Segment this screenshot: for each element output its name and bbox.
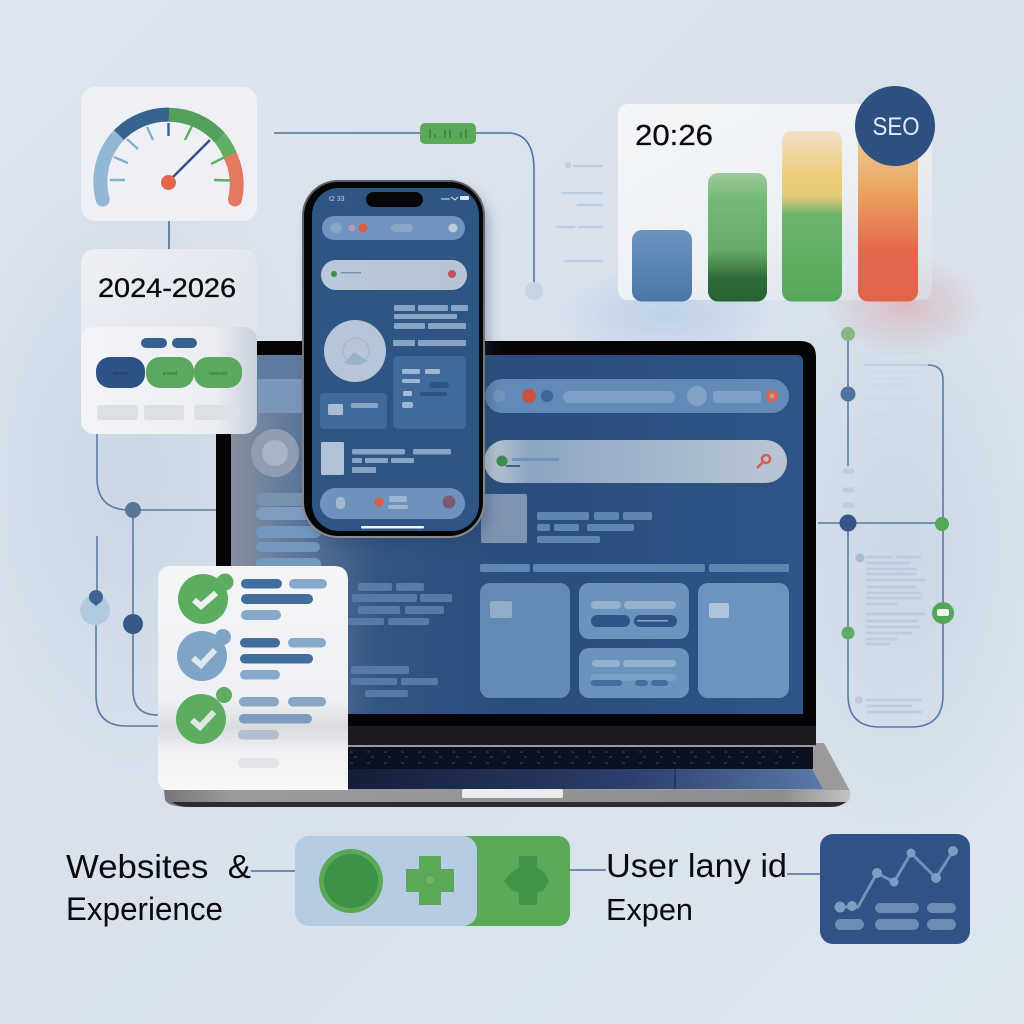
panel: checklist [158,566,348,790]
laptop base [164,789,850,807]
top bar [322,216,465,240]
feature tile [295,836,570,926]
icon: green circle [319,849,383,913]
phone [302,180,488,546]
faint text lines [866,557,925,712]
connector: tile to label [569,869,606,871]
home indicator [361,526,424,528]
thumbnail [481,494,527,543]
label: Websites & Experience: Experience [66,891,223,927]
search bar [484,440,787,483]
label: User lany id Expen: Expen [606,892,693,927]
right panel [393,356,466,429]
green chip [420,123,476,144]
connector: gauge to date card [168,221,170,249]
gauge ticks [110,123,230,180]
segmented sub card [81,327,257,434]
laptop screen [231,355,803,714]
top nav bar [485,379,789,413]
connector lines: top connector with green chip [274,123,543,300]
connector lines: left circuit [80,434,218,726]
node: circuit dark [123,614,143,634]
red key icon [757,455,770,468]
label: Websites & Experience [66,848,251,927]
connector: label to chart tile [787,873,820,875]
SEO badge [855,86,935,166]
status bar: t2 33 [329,196,345,203]
phone body [302,180,485,538]
text pills [393,305,468,346]
bottom bar [320,488,465,519]
SEO badge: SEO [872,113,920,141]
gauge needle [172,140,210,178]
check item 1 [178,574,327,624]
node: light pin [80,590,110,625]
right circuit with faint text [818,327,954,727]
chart time label: 20:26 [635,120,713,152]
label: User lany id Expen: User lany id [606,847,787,884]
green icon node [932,602,954,624]
left panel [320,393,387,429]
segmented sub card: snnvel [163,371,177,377]
laptop deck and keyboard [340,743,850,791]
date range heading: 2024-2026 [98,273,236,303]
node: circuit junction [125,502,141,518]
nodes [841,327,855,341]
label: User lany id Expen [606,847,787,927]
connector: label to feature tile [251,870,295,872]
panel: speedometer gauge [81,87,257,221]
search bar [321,260,467,290]
laptop lid [216,341,816,745]
dynamic island [366,192,423,207]
label: Websites & Experience: Websites & [66,848,251,885]
segmented sub card: soorxs [113,371,128,377]
bars [632,131,918,302]
icon: green plus [406,856,454,905]
mid text pills [348,583,452,697]
phone screen [312,188,479,531]
check item 2 [177,629,326,681]
left sidebar [231,355,321,572]
avatar circle [324,320,386,382]
sparkline [834,846,958,912]
faint endpoint [525,282,543,300]
laptop [164,341,850,807]
panel: line chart tile [820,834,970,944]
content cards [480,583,789,698]
list row [321,442,451,475]
icon: green connector [504,856,549,905]
check item 3 [176,687,326,768]
chart pills [835,903,956,930]
gauge hub [161,175,176,190]
content text pills [480,512,789,572]
segmented sub card: soorced [209,371,227,377]
faint annotation lines [556,162,603,261]
panel: date range card [81,249,257,434]
panel: bar chart [618,86,935,302]
gauge arc [100,115,237,200]
